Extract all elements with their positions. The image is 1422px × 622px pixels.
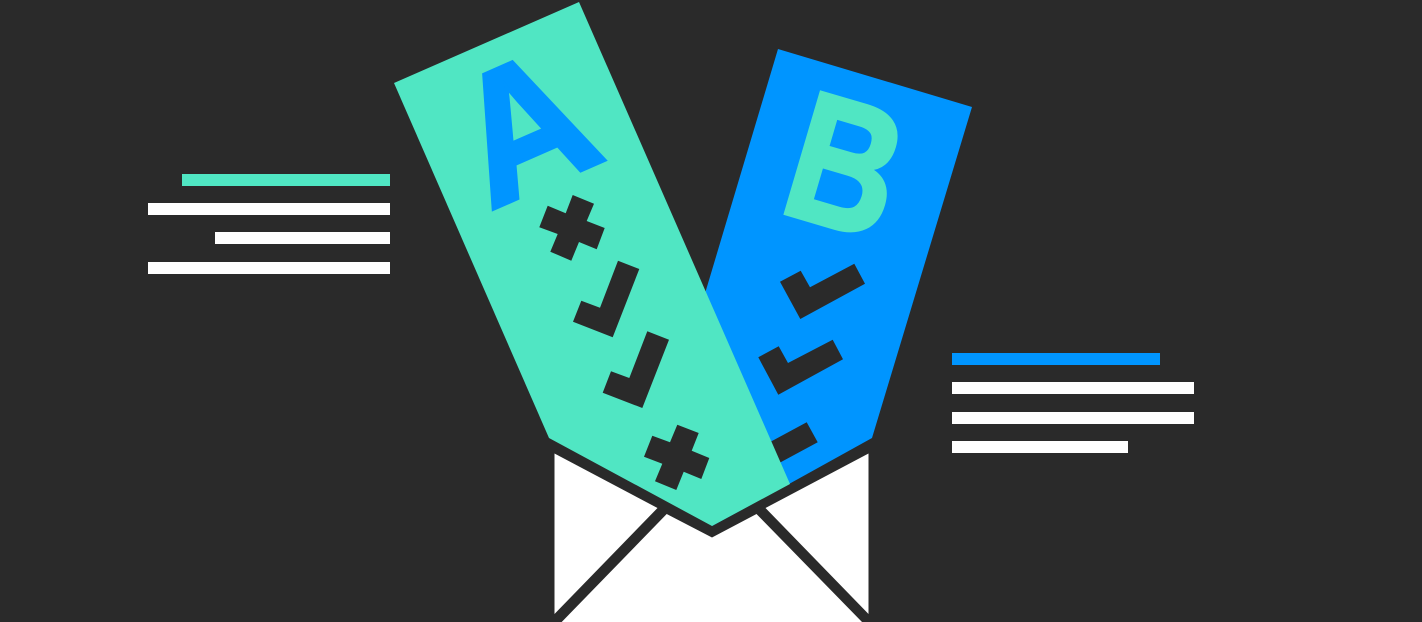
letter B: B: [765, 53, 926, 279]
letter A: A: [423, 6, 625, 247]
ballot A sheet: [394, 2, 790, 526]
minus mark: [759, 422, 818, 468]
ballot A: [394, 2, 790, 526]
envelope: [554, 454, 868, 622]
check mark 2: [758, 340, 843, 395]
check mark 2: [603, 331, 669, 408]
heading bar B: [952, 353, 1160, 365]
check mark 1: [780, 264, 865, 319]
envelope left flap: [554, 454, 658, 614]
text line 3: [148, 262, 390, 274]
plus mark 1: [539, 195, 605, 261]
ballot B: [672, 49, 972, 526]
text lines: variant A summary: [148, 174, 390, 274]
check mark 1: [573, 261, 639, 337]
text line 2: [215, 232, 390, 244]
text line 1: [952, 382, 1194, 394]
envelope front: [562, 514, 862, 622]
text line 2: [952, 412, 1194, 424]
plus mark 2: [644, 425, 709, 490]
heading bar A: [182, 174, 390, 186]
text line 3: [952, 441, 1128, 453]
envelope right flap: [766, 454, 868, 614]
text line 1: [148, 203, 390, 215]
ballot B sheet: [672, 49, 972, 526]
text lines: variant B summary: [952, 353, 1194, 453]
